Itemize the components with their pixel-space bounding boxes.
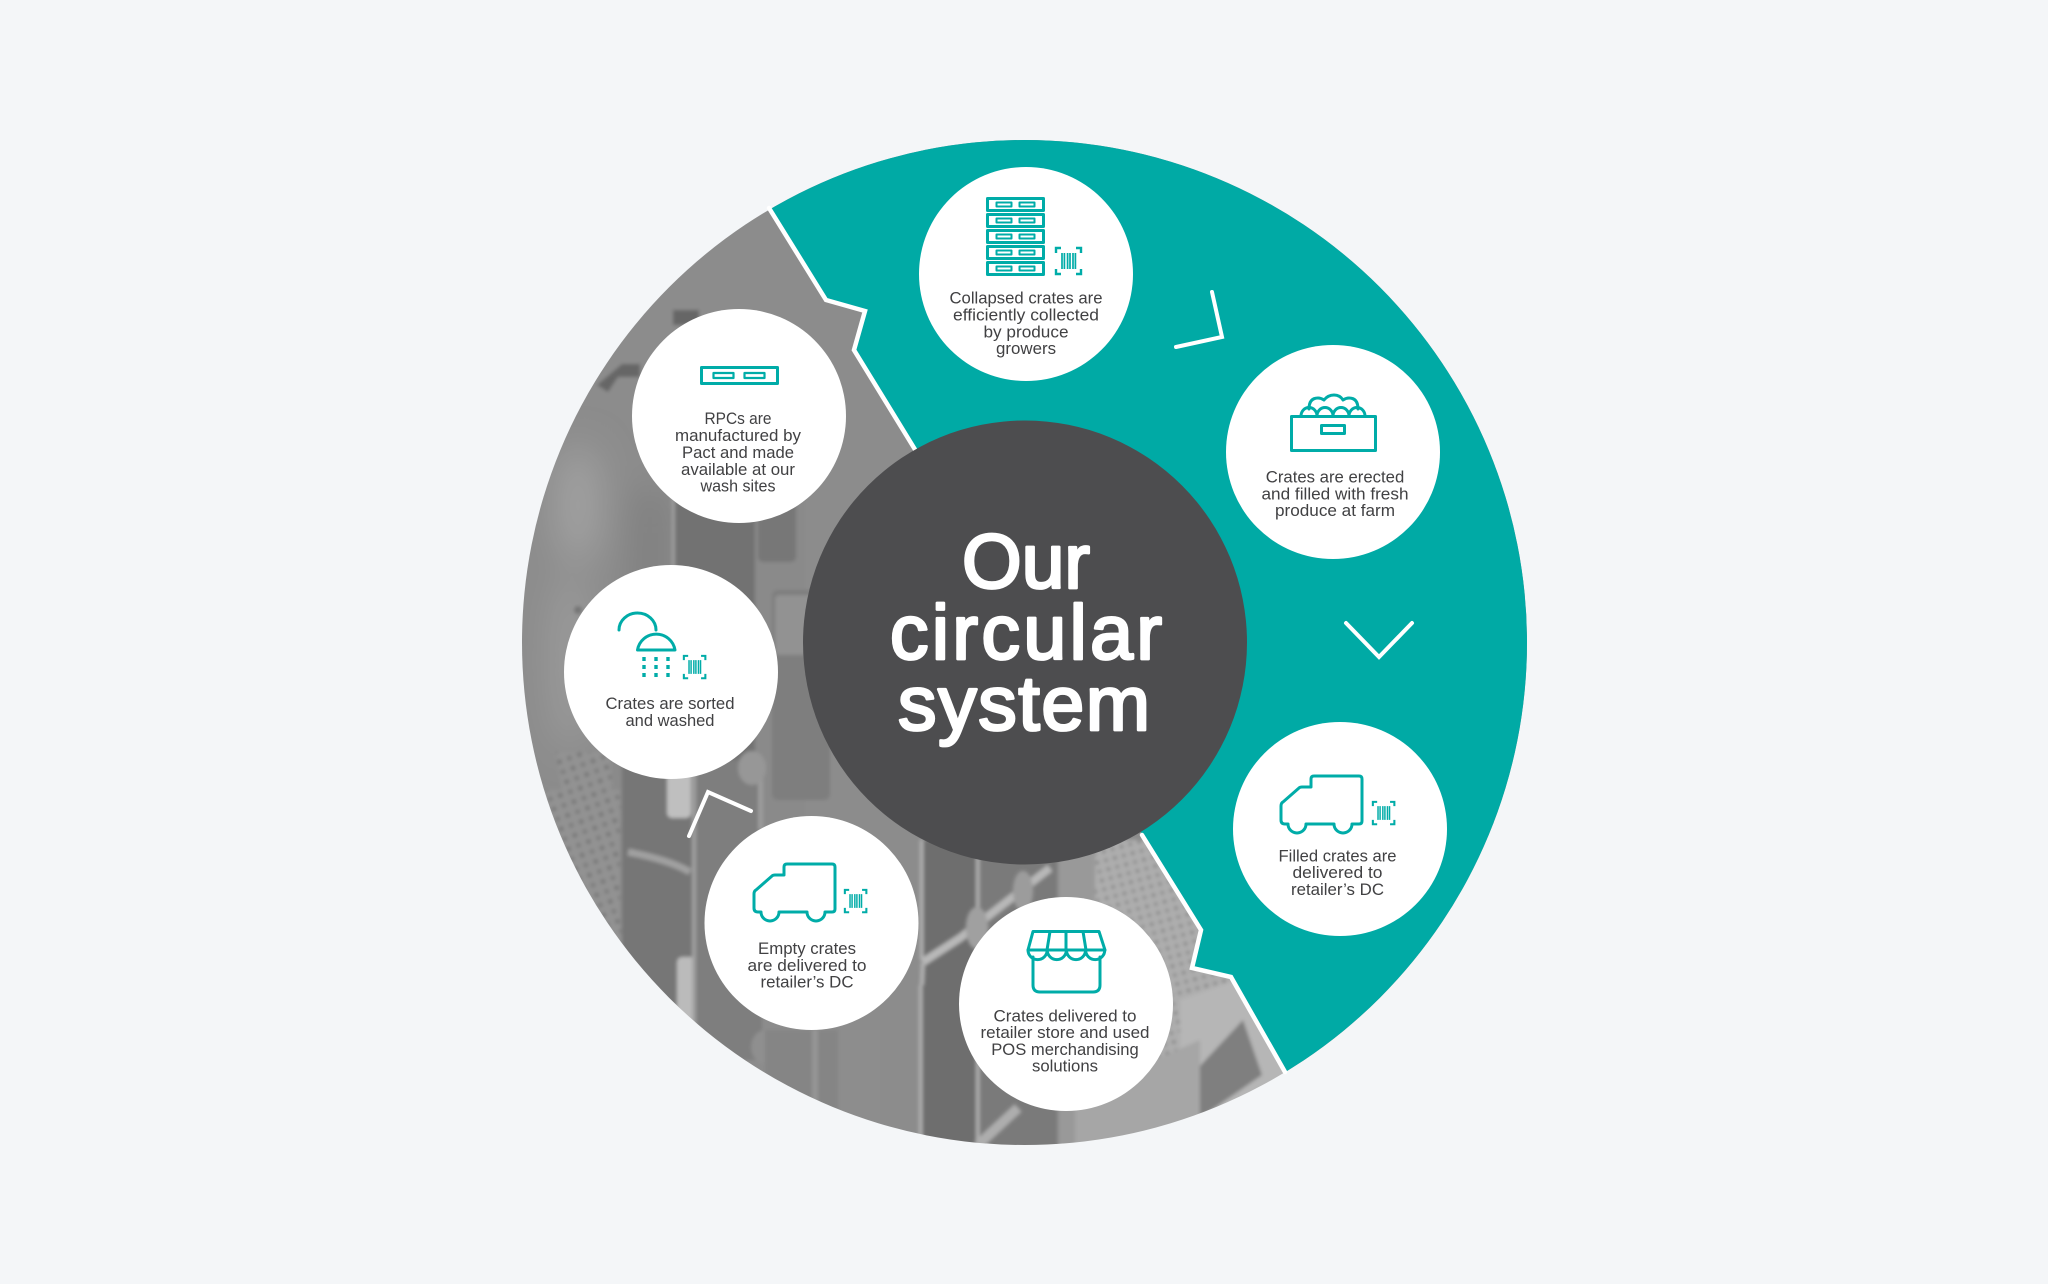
step: sorted and washed xyxy=(564,565,778,779)
text: sorted and washed: Crates are sorted xyxy=(606,695,734,713)
text: retailer store xyxy=(980,1008,1150,1076)
text: retailer store: POS merchandising xyxy=(991,1041,1139,1059)
step: retailer store xyxy=(959,897,1173,1111)
text: filled crates delivered: delivered to xyxy=(1292,864,1382,882)
step: empty crates delivered xyxy=(704,816,918,1030)
text: crates erected: and filled with fresh xyxy=(1262,486,1408,504)
text: empty crates delivered: retailer’s DC xyxy=(760,974,854,992)
text: filled crates delivered: retailer’s DC xyxy=(1291,881,1384,899)
text: collapsed crates: Collapsed crates are xyxy=(950,290,1102,308)
panel: teal half of the circle xyxy=(772,140,1527,1071)
icon: collapsed crate xyxy=(702,368,778,384)
divider: white zigzag boundary, top xyxy=(769,208,915,450)
text: RPCs manufactured: manufactured by xyxy=(675,427,802,445)
text: RPCs manufactured: RPCs are xyxy=(704,410,772,428)
text: retailer store: Crates delivered to xyxy=(994,1008,1136,1026)
text: RPCs manufactured: wash sites xyxy=(700,478,776,496)
title: system xyxy=(898,661,1150,747)
divider: white zigzag boundary, bottom xyxy=(1142,835,1285,1072)
text: empty crates delivered xyxy=(748,940,866,992)
text: RPCs manufactured xyxy=(675,410,802,496)
icon: delivery truck with barcode xyxy=(1281,776,1394,833)
icon: delivery truck with barcode xyxy=(754,864,866,921)
text: sorted and washed: and washed xyxy=(626,712,714,730)
title: circular xyxy=(890,590,1162,676)
centre circle with title xyxy=(803,420,1247,864)
text: retailer store: retailer store and used xyxy=(980,1024,1150,1042)
step: RPCs manufactured xyxy=(632,309,846,523)
text: empty crates delivered: are delivered to xyxy=(748,957,866,975)
text: collapsed crates: efficiently collected xyxy=(953,306,1099,324)
icon: stacked crates with barcode xyxy=(988,198,1081,274)
title: Our xyxy=(962,519,1090,605)
title xyxy=(890,519,1162,747)
step: collapsed crates xyxy=(919,167,1133,381)
arrow: top right xyxy=(1176,292,1222,347)
step: crates erected xyxy=(1226,345,1440,559)
text: retailer store: solutions xyxy=(1032,1058,1098,1076)
text: filled crates delivered: Filled crates are xyxy=(1278,848,1396,866)
arrow: lower left xyxy=(689,792,751,836)
icon: crate of produce xyxy=(1292,395,1376,450)
text: filled crates delivered xyxy=(1278,848,1396,899)
text: collapsed crates: growers xyxy=(996,340,1056,358)
text: crates erected xyxy=(1262,468,1408,520)
text: empty crates delivered: Empty crates xyxy=(758,940,856,958)
arrow: right xyxy=(1346,623,1412,657)
text: sorted and washed xyxy=(606,695,734,730)
icon: shower with barcode xyxy=(619,613,705,678)
text: collapsed crates: by produce xyxy=(984,324,1068,342)
step: filled crates delivered xyxy=(1233,722,1447,936)
photo panel: grey crate texture xyxy=(510,130,1540,1160)
text: RPCs manufactured: Pact and made xyxy=(682,444,794,462)
text: RPCs manufactured: available at our xyxy=(681,461,795,479)
text: crates erected: Crates are erected xyxy=(1266,468,1404,486)
text: collapsed crates xyxy=(950,290,1102,358)
icon: shop front xyxy=(1028,932,1105,992)
text: crates erected: produce at farm xyxy=(1275,502,1395,520)
